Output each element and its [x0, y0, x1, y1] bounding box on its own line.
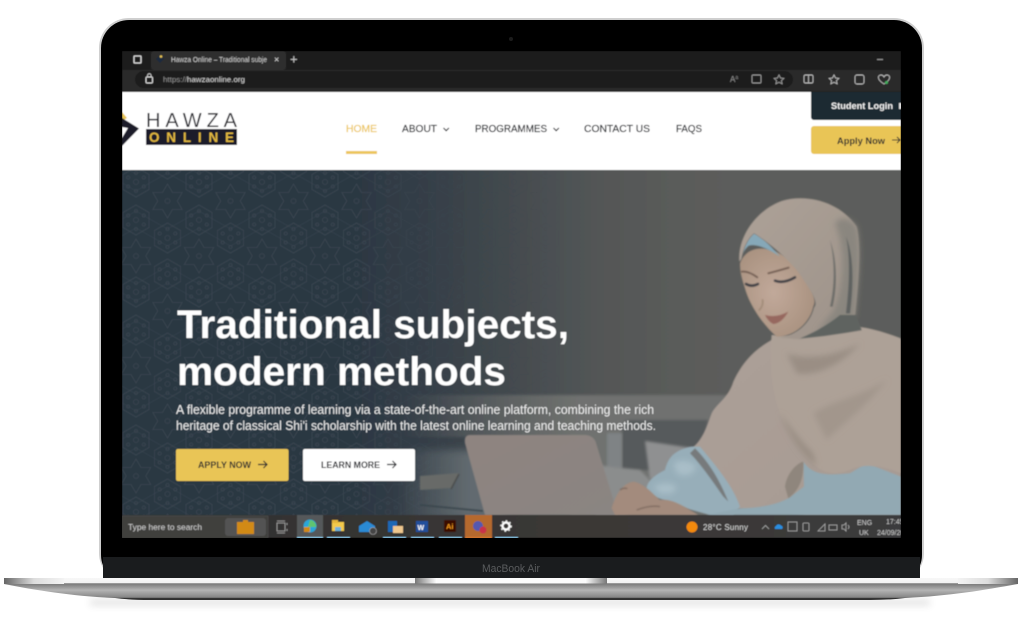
- icon: task view: [277, 521, 287, 533]
- hero left dark overlay: [122, 170, 604, 516]
- hero heading: [176, 308, 568, 386]
- icon: word: W: [418, 525, 424, 532]
- hero photo: plant shadow: [432, 265, 463, 345]
- base left end highlight: [4, 578, 64, 584]
- navigation: PROGRAMMES: [475, 123, 547, 135]
- hero section: [122, 170, 901, 520]
- hero learn more button: LEARN MORE: [321, 460, 380, 471]
- woman body shawl: [690, 340, 901, 515]
- woman face: [740, 248, 815, 337]
- icon: file explorer: [327, 520, 350, 538]
- icon: lock: [146, 74, 152, 83]
- navigation: HOME: [346, 123, 377, 135]
- browser toolbar icons: A: [730, 75, 735, 84]
- hero apply now button: APPLY NOW: [198, 460, 251, 471]
- windows taskbar: [122, 515, 912, 538]
- hero paragraph: [176, 403, 656, 433]
- hero learn more button: [303, 449, 415, 481]
- language indicator: UK: [859, 530, 869, 537]
- hero photo: desk notebook: [420, 473, 483, 511]
- hero heading: modern methods: [177, 350, 506, 394]
- browser toolbar icons: a: [735, 75, 738, 81]
- icon: outlook: [383, 521, 406, 538]
- woman hands: [612, 482, 698, 515]
- weather widget: 28°C Sunny: [703, 523, 748, 532]
- student login button: [811, 92, 902, 120]
- icon: edge: [297, 515, 323, 538]
- logo: [122, 110, 238, 146]
- logo tag: ONLINE: [149, 130, 234, 145]
- MacBook label: MacBook Air: [482, 563, 540, 575]
- browser tab bar: [122, 51, 901, 70]
- navigation: FAQS: [676, 123, 702, 135]
- clock: 24/09/2021: [877, 530, 912, 537]
- hero photo: laptop: [465, 435, 618, 515]
- new tab button: +: [290, 52, 298, 66]
- url: https://hawzaonline.org: [163, 75, 245, 84]
- apply now header button: [811, 126, 901, 154]
- language indicator: ENG: [857, 520, 872, 527]
- logo mark: [122, 112, 139, 146]
- taskbar search box: Type here to search: [128, 523, 202, 532]
- active tab: Hawza Online – Traditional subje: [171, 55, 267, 64]
- laptop chin: [103, 557, 920, 578]
- browser address bar: [144, 72, 891, 86]
- active tab: [151, 51, 286, 70]
- woman facial features: [742, 268, 795, 324]
- icon: illustrator: [439, 520, 462, 538]
- woman shawl drape: [771, 327, 901, 473]
- icon: illustrator: Ai: [446, 522, 454, 531]
- hero heading: Traditional subjects,: [177, 303, 569, 347]
- woman sleeve: [646, 447, 740, 515]
- window minimise: [877, 59, 883, 60]
- laptop base: [4, 578, 1018, 600]
- clock: [877, 519, 912, 537]
- weather widget: [686, 522, 748, 532]
- apply now header button: Apply Now: [837, 136, 886, 147]
- clock: 17:45: [886, 519, 904, 526]
- icon: tab actions: [134, 56, 141, 63]
- site header: [122, 92, 902, 170]
- base right end highlight: [958, 578, 1018, 584]
- language indicator: [857, 520, 872, 537]
- lid opening notch: [415, 578, 607, 584]
- screen: [122, 51, 912, 538]
- hero paragraph: A flexible programme of learning via a state-of-the-art online platform, combining the rich: [176, 403, 654, 417]
- icon: word: [411, 521, 434, 538]
- logo wordmark: HAWZA: [146, 110, 238, 132]
- taskbar search box: [122, 516, 268, 538]
- icon: mail: [359, 521, 376, 534]
- woman teardrop gap: [785, 462, 803, 498]
- icon: settings: [495, 521, 518, 538]
- navigation: CONTACT US: [584, 123, 650, 135]
- navigation: ABOUT: [402, 123, 438, 135]
- system tray icons: [762, 522, 849, 531]
- woman blue shirt: [732, 463, 901, 516]
- active tab: ×: [274, 54, 279, 64]
- laptop lid: [99, 18, 924, 583]
- hero geometric pattern: [122, 171, 380, 515]
- woman hijab band: [743, 233, 780, 257]
- icon: teams: [465, 515, 492, 538]
- webcam: [509, 37, 513, 41]
- student login button: Student Login: [831, 101, 893, 112]
- hero photo: room background: [395, 395, 740, 520]
- navigation: [346, 123, 702, 154]
- hero paragraph: heritage of classical Shi'i scholarship with the latest online learning and teaching methods.: [176, 419, 656, 433]
- hero apply now button: [176, 449, 288, 481]
- hero photo: woman: [612, 198, 901, 515]
- laptop base shadow: [90, 600, 930, 605]
- woman head scarf: [739, 198, 862, 339]
- browser toolbar icons: [730, 75, 890, 84]
